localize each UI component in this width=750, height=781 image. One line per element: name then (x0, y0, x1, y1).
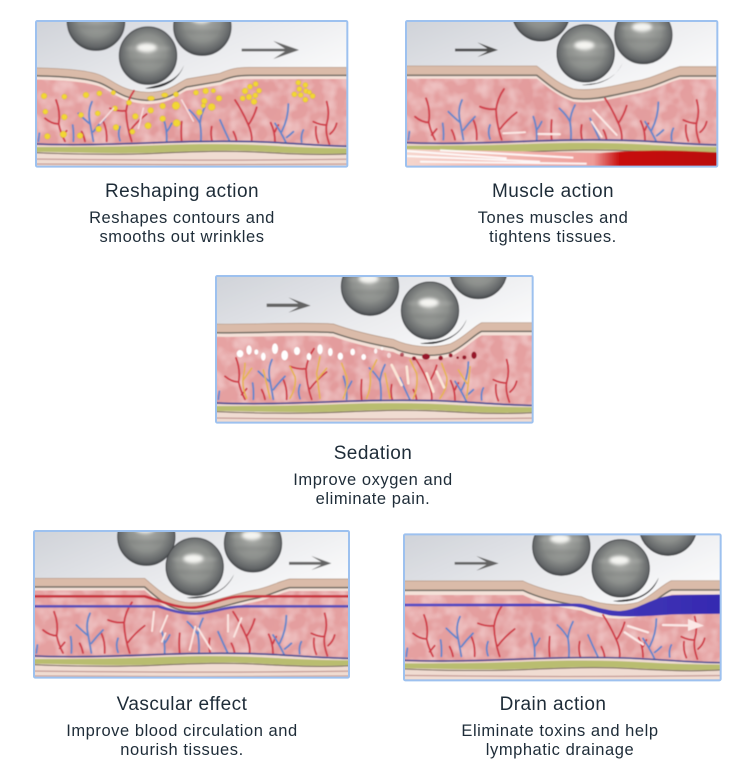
heading: Muscle action (492, 181, 614, 202)
panel: vascular effect (33, 530, 706, 759)
description (293, 471, 453, 508)
lymph vessel (398, 594, 731, 617)
rollers (512, 0, 672, 82)
direction arrow (267, 297, 311, 313)
description: eliminate pain. (316, 490, 430, 508)
description: smooths out wrinkles (99, 228, 265, 246)
direction arrow (455, 42, 498, 57)
direction arrow (289, 556, 331, 570)
direction arrow (455, 556, 499, 571)
white and red cells (237, 343, 391, 361)
description (478, 209, 628, 246)
description: Tones muscles and (478, 209, 628, 227)
rollers (118, 508, 282, 595)
panel: reshaping action (35, 20, 348, 246)
description (66, 722, 298, 759)
illustration: rollers over lymph vessel (403, 533, 722, 682)
illustration: rollers over blood vessels (33, 530, 706, 679)
description: lymphatic drainage (486, 741, 634, 759)
illustration: rollers over skin and muscle (405, 20, 718, 168)
direction arrow (242, 41, 299, 59)
rollers (341, 241, 507, 339)
description (461, 722, 659, 759)
rollers (67, 0, 231, 84)
nerve fibres (243, 357, 470, 398)
panel: muscle action (405, 20, 718, 246)
description: Reshapes contours and (89, 209, 275, 227)
heading: Reshaping action (105, 181, 259, 202)
illustration: rollers over nerves (215, 275, 534, 424)
heading: Drain action (500, 694, 606, 715)
illustration: rollers on skin with fat cells (35, 20, 348, 168)
description: Improve oxygen and (293, 471, 453, 489)
description: nourish tissues. (120, 741, 244, 759)
description (89, 209, 275, 246)
description: Eliminate toxins and help (461, 722, 659, 740)
panel: sedation (215, 275, 534, 508)
panel: drain action (403, 533, 722, 759)
description: Improve blood circulation and (66, 722, 298, 740)
rollers (533, 498, 697, 597)
artery and vein (28, 596, 361, 608)
description: tightens tissues. (489, 228, 617, 246)
fat cells (41, 80, 315, 139)
heading: Sedation (334, 443, 412, 464)
muscle layer (407, 148, 716, 166)
heading: Vascular effect (117, 694, 247, 715)
